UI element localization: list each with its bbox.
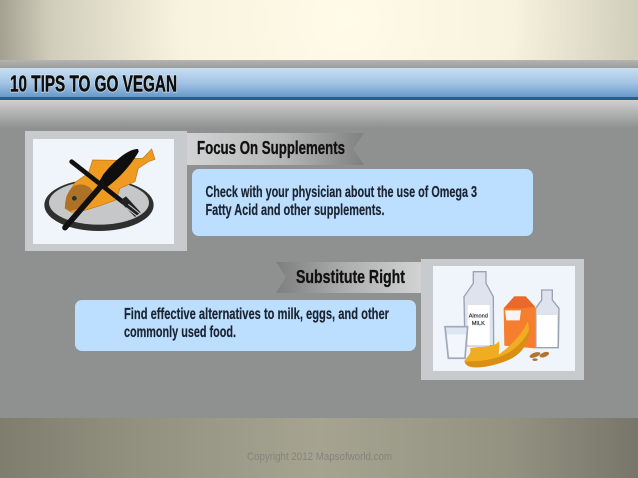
footer background — [0, 418, 638, 478]
text box: supplements advice — [192, 169, 533, 236]
main grey background — [0, 100, 638, 418]
copyright: Copyright 2012 Mapsofworld.com — [247, 451, 392, 463]
image frame: no fish — [25, 131, 187, 251]
ribbon: substitute right — [276, 262, 422, 293]
header bar — [0, 60, 638, 128]
icon: crossed knife and fork over fish on plate — [33, 139, 174, 244]
text box: substitution advice: commonly used food. — [124, 324, 236, 341]
text box: supplements advice: Fatty Acid and other supplements. — [206, 202, 384, 219]
title — [10, 70, 177, 96]
top cream background — [0, 0, 638, 60]
title: 10 TIPS TO GO VEGAN — [10, 70, 177, 96]
title: 10 TIPS TO GO VEGAN — [10, 70, 177, 96]
panel: focus on supplements — [25, 131, 533, 251]
icon: almond milk, carton, glass, bananas — [433, 266, 575, 371]
image frame: milk alternatives — [421, 259, 584, 380]
text box: supplements advice: Check with your physician about the use of Omega 3 — [206, 184, 477, 201]
ribbon: focus on supplements — [187, 133, 364, 165]
icon: almond milk, carton, glass, bananas: Almond — [469, 314, 488, 320]
heading: Focus On Supplements — [197, 138, 345, 158]
icon: almond milk, carton, glass, bananas: MILK — [472, 321, 485, 327]
heading: Substitute Right — [296, 267, 405, 287]
panel: substitute right — [75, 259, 584, 380]
text box: substitution advice: Find effective alternatives to milk, eggs, and other — [124, 306, 389, 323]
text box: substitution advice — [75, 300, 416, 351]
